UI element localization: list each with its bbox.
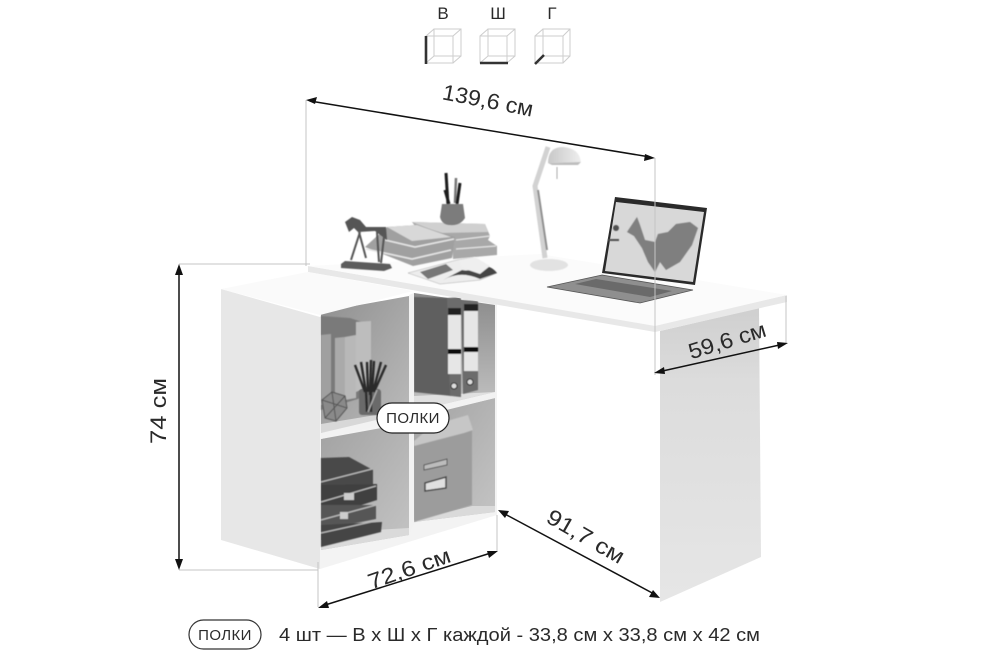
- lower right shelf cell: [414, 398, 495, 522]
- label: 72,6 cm: 72,6 см: [364, 543, 454, 594]
- arrow: 91,7 cm: [498, 510, 660, 598]
- label: 139,6 cm: 139,6 см: [440, 79, 535, 122]
- arrow: 139,6 cm: [306, 97, 655, 161]
- desktop: [308, 254, 787, 332]
- icon: width: Ш: [490, 4, 506, 23]
- dimension legend: [426, 4, 570, 64]
- pen cup: [440, 173, 465, 225]
- callout: shelves: ПОЛКИ: [386, 410, 440, 427]
- horse figurine: [341, 217, 392, 271]
- laptop wallpaper: [608, 217, 698, 272]
- laptop screen: [602, 197, 707, 285]
- footer pill: shelves: ПОЛКИ: [198, 627, 252, 644]
- cabinet front body: [320, 295, 497, 569]
- arrow: 59,6 cm: [654, 342, 788, 374]
- icon: depth: Г: [547, 4, 557, 23]
- desk lamp: [530, 147, 581, 271]
- label: 59,6 cm: 59,6 см: [685, 317, 769, 364]
- storage box: [414, 415, 473, 522]
- upper left shelf cell: [321, 296, 409, 433]
- open magazine: [408, 257, 497, 284]
- footer text: 4 шт — В х Ш х Г каждой - 33,8 см х 33,8 см х 42 см: [279, 624, 760, 645]
- geometric ball: [322, 392, 347, 421]
- dimension lines: [179, 100, 786, 607]
- icon: width: [480, 4, 515, 63]
- cabinet side panel: [221, 289, 320, 569]
- cabinet shelf: [321, 392, 495, 439]
- arrow: 74 cm: [175, 264, 183, 570]
- label: 91,7 cm: 91,7 см: [542, 504, 629, 569]
- laptop: [547, 197, 707, 303]
- footer pill: shelves: [189, 620, 261, 649]
- cabinet: [221, 289, 497, 569]
- label: 74 cm: 74 см: [146, 378, 171, 444]
- shelf bottoms: [321, 392, 495, 550]
- laptop base: [547, 275, 693, 303]
- right leg panel: [660, 308, 761, 602]
- icon: height: [426, 4, 461, 64]
- books on desk: [365, 222, 497, 266]
- upper right shelf cell: [414, 293, 495, 412]
- pencil cup: [355, 360, 386, 415]
- lower left shelf cell: [321, 423, 409, 550]
- footer note: [189, 620, 760, 649]
- icon: depth: [535, 4, 570, 64]
- cabinet divider: [409, 293, 414, 536]
- dimension arrows: [175, 97, 788, 608]
- cabinet top: [221, 272, 413, 315]
- icon: height: В: [437, 4, 449, 23]
- books in upper shelf: [321, 316, 371, 410]
- binders: [414, 297, 478, 397]
- stacked books: [321, 457, 382, 547]
- arrow: 72,6 cm: [318, 551, 498, 608]
- callout: shelves: [377, 403, 449, 433]
